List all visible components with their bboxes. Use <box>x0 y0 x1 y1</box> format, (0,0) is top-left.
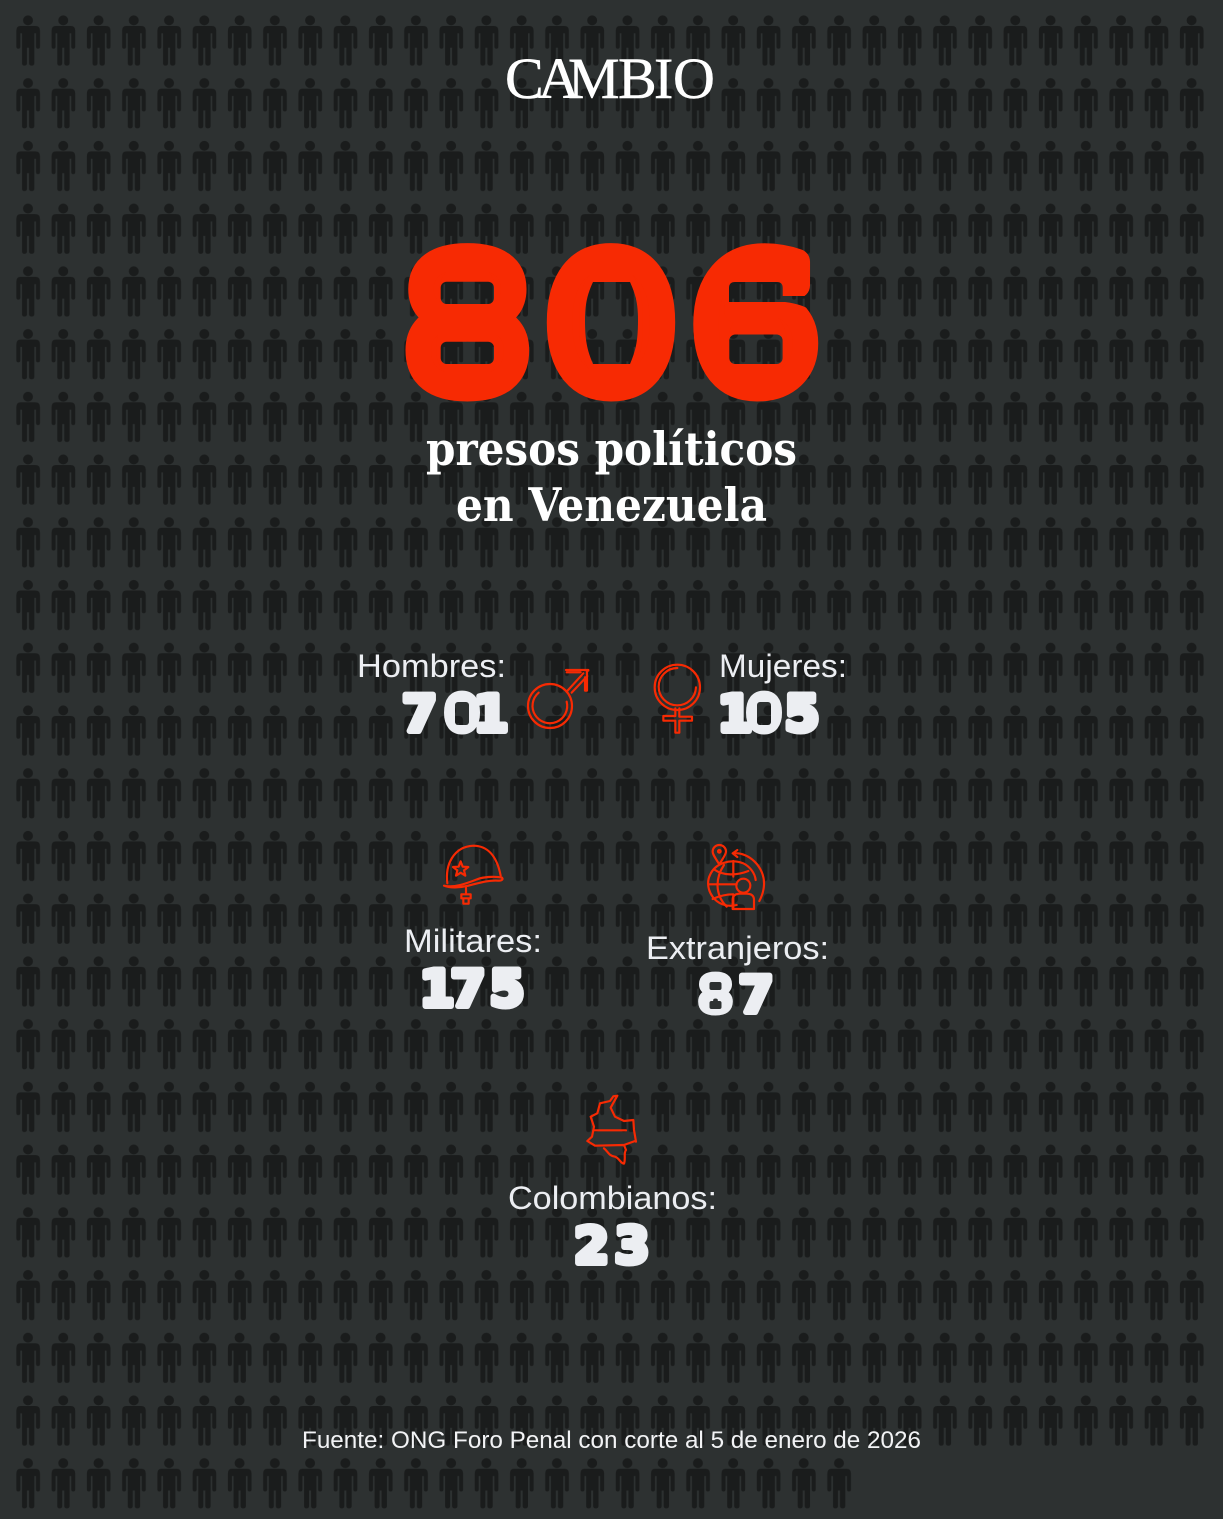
stat: Mujeres 105: Mujeres: <box>719 648 847 684</box>
stat: Colombianos 23 <box>508 1180 717 1275</box>
stat: Hombres 701: Hombres: <box>357 648 506 684</box>
icon: female symbol <box>655 665 700 733</box>
icon: Colombia map <box>587 1096 636 1164</box>
stat: Mujeres 105 <box>720 654 844 734</box>
title: presos políticos en Venezuela: presos políticos <box>426 422 797 476</box>
stat: Colombianos 23: 23 <box>574 1217 649 1275</box>
stat: Militares 175: 175 <box>420 960 524 1018</box>
title: presos políticos en Venezuela: en Venezuela <box>456 478 767 532</box>
big number: 806: 806 <box>408 223 815 427</box>
stat: Extranjeros 87 <box>648 936 826 1016</box>
stat: Mujeres 105: 105 <box>718 685 819 743</box>
icon: globe with person and pin <box>708 845 764 909</box>
icon: soldier helmet <box>444 846 502 904</box>
stat: Militares 175: Militares: <box>404 923 542 959</box>
stat: Extranjeros 87: Extranjeros: <box>646 930 829 966</box>
icon: male symbol <box>528 670 588 728</box>
logo: CAMBIO: CAMBIO <box>505 46 715 111</box>
title: presos políticos en Venezuela <box>426 422 797 532</box>
stat: Militares 175 <box>404 923 542 1018</box>
source note: Fuente: ONG Foro Penal con corte al 5 de enero de 2026 <box>302 1427 921 1454</box>
stat: Colombianos 23: Colombianos: <box>508 1180 717 1216</box>
stat: Hombres 701: 701 <box>402 685 508 743</box>
stat: Extranjeros 87: 87 <box>698 966 773 1024</box>
stat: Hombres 701 <box>360 654 508 734</box>
